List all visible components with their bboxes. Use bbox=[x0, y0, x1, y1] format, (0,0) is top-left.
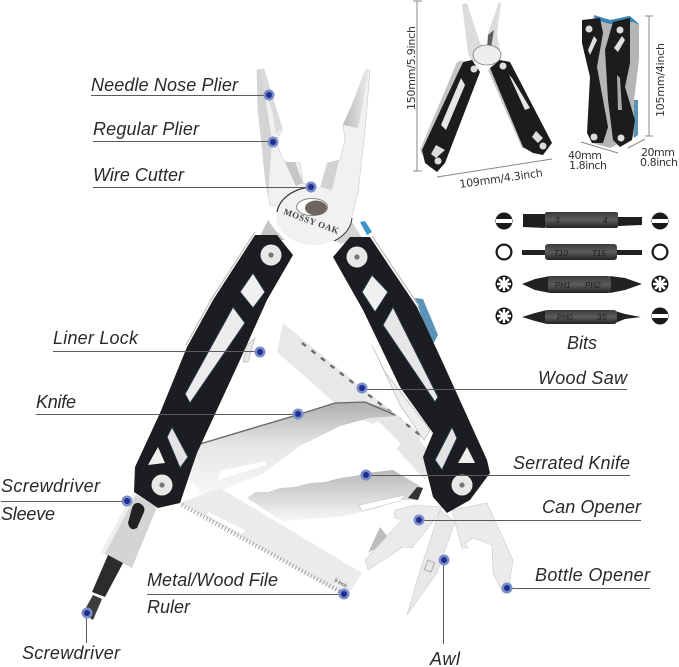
callout: screwdriver sleeve bbox=[1, 476, 132, 524]
callout: regular plier: Regular Plier bbox=[93, 119, 200, 139]
callout: screwdriver bbox=[22, 608, 121, 663]
dimension labels: 150mm/5.9inch bbox=[405, 26, 418, 110]
bit row 3 bbox=[496, 276, 668, 293]
callout: knife: Knife bbox=[36, 392, 76, 412]
bit row 3: PH1 bbox=[555, 281, 571, 290]
mini open tool bbox=[420, 2, 552, 172]
pivot disc with logo bbox=[276, 187, 352, 245]
callout: bottle opener: Bottle Opener bbox=[535, 565, 651, 585]
callout: wood saw bbox=[356, 368, 628, 394]
callout: metal/wood file and ruler: Metal/Wood File bbox=[147, 570, 278, 590]
callout: needle nose plier bbox=[91, 75, 274, 100]
callout: awl bbox=[429, 554, 461, 667]
callout: serrated knife: Serrated Knife bbox=[513, 453, 630, 473]
callout: liner lock: Liner Lock bbox=[53, 328, 139, 348]
bit row 2: T10 bbox=[554, 249, 568, 258]
bit row 4 bbox=[496, 308, 668, 324]
pliers bbox=[257, 69, 372, 244]
dimension labels: 0.8inch bbox=[640, 156, 678, 169]
dimension lines bbox=[413, 1, 653, 177]
bit row 4: PH0 bbox=[557, 313, 573, 322]
callout: wire cutter bbox=[93, 165, 316, 192]
dimension labels bbox=[405, 26, 678, 191]
mini closed tool bbox=[582, 15, 640, 148]
awl bbox=[407, 510, 455, 615]
knife blade bbox=[190, 402, 398, 497]
dimension labels: 40mm bbox=[568, 149, 602, 162]
bottle opener bbox=[452, 503, 513, 593]
left handle bbox=[134, 232, 293, 508]
dimension labels: 109mm/4.3inch bbox=[459, 166, 544, 191]
callout: screwdriver sleeve: Screwdriver bbox=[1, 476, 101, 496]
bit row 1: 3 bbox=[555, 216, 560, 225]
liner lock bbox=[193, 338, 255, 443]
file and ruler: 9 Inch bbox=[333, 578, 348, 590]
bits label: Bits bbox=[567, 333, 597, 353]
callout: wood saw: Wood Saw bbox=[538, 368, 628, 388]
callout: serrated knife bbox=[360, 453, 630, 480]
callout: regular plier bbox=[93, 119, 278, 148]
right handle bbox=[333, 236, 490, 513]
callout: screwdriver sleeve: Sleeve bbox=[1, 504, 55, 524]
callout: liner lock bbox=[53, 328, 266, 358]
folded tang bbox=[370, 416, 432, 480]
file and ruler bbox=[180, 488, 362, 597]
screwdriver bit bbox=[83, 555, 123, 620]
bit row 2 bbox=[496, 244, 668, 260]
bit row 1 bbox=[496, 212, 668, 230]
can opener bbox=[365, 505, 442, 570]
bits panel bbox=[496, 212, 668, 353]
main multitool bbox=[83, 69, 513, 620]
pivot disc with logo: MOSSY OAK bbox=[282, 206, 340, 236]
callout: needle nose plier: Needle Nose Plier bbox=[91, 75, 239, 95]
serrated knife bbox=[247, 470, 423, 521]
callout: bottle opener bbox=[502, 565, 651, 594]
dimension labels: 1.8inch bbox=[569, 159, 607, 172]
screws bbox=[152, 244, 472, 496]
blue liner behind right handle bbox=[415, 298, 438, 346]
callout: metal/wood file and ruler: Ruler bbox=[147, 597, 191, 617]
callout: knife bbox=[36, 392, 304, 420]
screwdriver sleeve bbox=[101, 493, 157, 568]
callout: screwdriver: Screwdriver bbox=[22, 643, 121, 663]
callout: wire cutter: Wire Cutter bbox=[93, 165, 185, 185]
dimension labels: 105mm/4inch bbox=[654, 43, 667, 117]
callout: can opener bbox=[414, 497, 642, 526]
callout: metal/wood file and ruler bbox=[147, 570, 350, 617]
bit row 1: 4 bbox=[603, 216, 608, 225]
bit row 4: 3S bbox=[597, 313, 607, 322]
right handle inner silver strip bbox=[372, 345, 430, 440]
bit row 3: PH2 bbox=[585, 281, 601, 290]
callout: can opener: Can Opener bbox=[542, 497, 642, 517]
dimension labels: 20mm bbox=[641, 146, 675, 159]
wood saw blade bbox=[277, 323, 421, 445]
bit row 2: T15 bbox=[592, 249, 606, 258]
